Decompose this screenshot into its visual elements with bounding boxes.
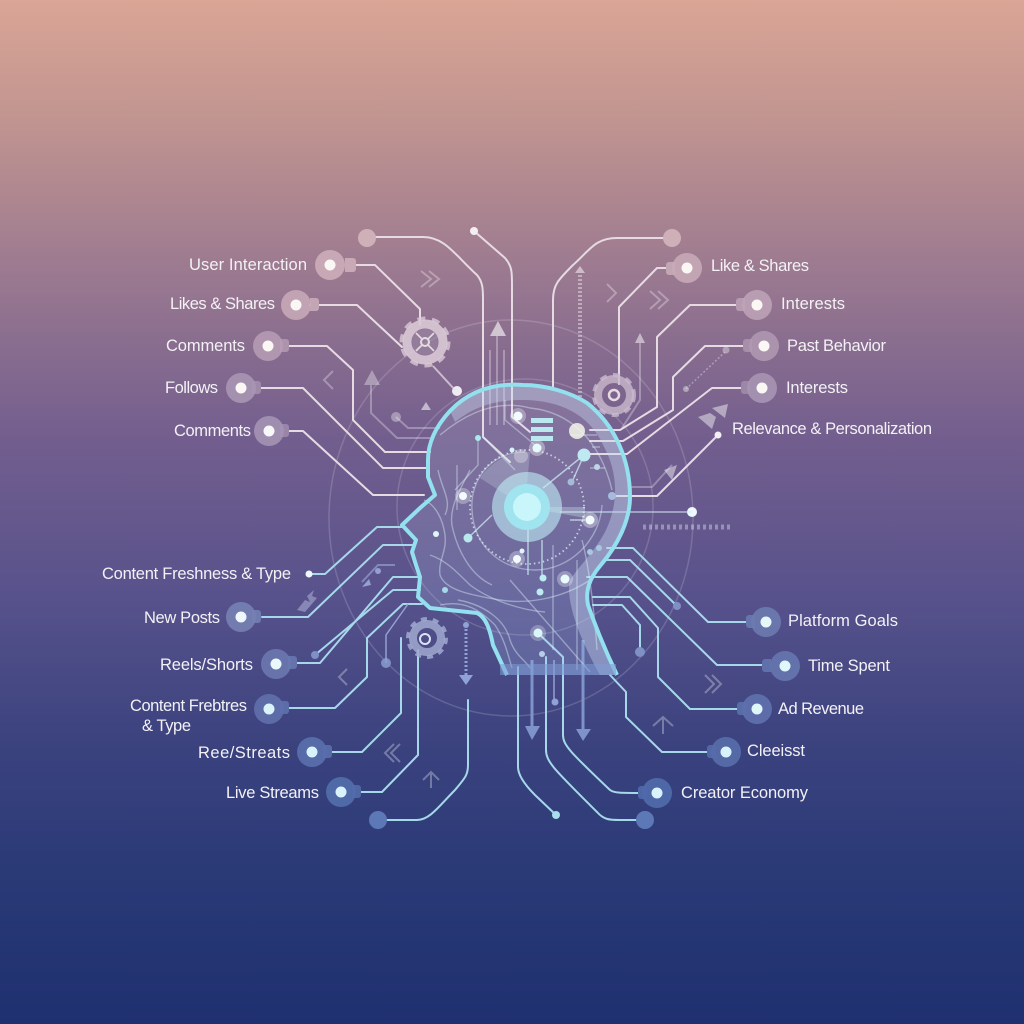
label: Likes & Shares [170,290,319,320]
label: Live Streams [226,777,361,807]
label: New Posts [144,602,261,632]
label: Interests upper: Interests [781,295,845,313]
neural nodes inside head [433,408,616,657]
icon: upper right gear [594,375,634,415]
label: Like & Shares right: Like & Shares [711,257,809,275]
label: Interests lower [741,373,848,403]
neck base [500,664,616,675]
label: New Posts: New Posts [144,609,220,627]
label: Content Frebtres & Type [130,694,289,735]
label: Ree/Streats [198,737,332,767]
label: Live Streams: Live Streams [226,784,319,802]
label: Comments lower [174,416,289,446]
label: Ad Revenue: Ad Revenue [778,700,864,718]
label: Relevance & Personalization: Relevance & Personalization [732,420,932,438]
label: Interests upper [736,290,845,320]
faint decorative arrows near the head [297,227,732,819]
label: Comments upper: Comments [166,337,245,355]
lower left circuit lines [262,527,468,820]
label: Likes & Shares: Likes & Shares [170,295,275,313]
central hub [470,450,585,564]
head fill [402,385,630,675]
label: Cleeisst [707,737,805,767]
label: Ad Revenue [737,694,864,724]
upper right circuit lines [553,238,750,496]
label: Platform Goals: Platform Goals [788,612,898,630]
head outline [402,385,630,675]
label: Platform Goals [746,607,898,637]
label: Creator Economy [638,778,809,808]
icon: bars in head [531,418,553,441]
head silhouette [402,385,630,675]
label: Follows: Follows [165,379,218,397]
label: Reels/Shorts: Reels/Shorts [160,656,253,674]
label: Content Frebtres & Type: Content Frebtres [130,697,247,715]
label: Follows [165,373,261,403]
top free nodes [358,229,681,829]
lower center and right circuit lines [518,548,768,820]
outer orbit rings [329,320,693,716]
label: Comments upper [166,331,289,361]
label: Ree/Streats: Ree/Streats [198,744,290,762]
label: Like & Shares right [666,253,809,283]
upper left circuit lines [255,231,530,495]
label: Time Spent: Time Spent [808,657,890,675]
label: Interests lower: Interests [786,379,848,397]
head side band [450,385,630,675]
label: User Interaction [189,250,356,280]
label: Comments lower: Comments [174,422,251,440]
label: Creator Economy: Creator Economy [681,784,809,802]
icon: lower left gear [408,619,446,657]
icon: upper left gear [402,318,448,366]
label: Reels/Shorts [160,649,297,679]
label: Past Behavior [743,331,886,361]
faint decorative arrows and chevrons [324,271,721,788]
label: Content Frebtres & Type: & Type [142,717,191,735]
label: Time Spent [762,651,890,681]
label: User Interaction: User Interaction [189,256,307,274]
label: Past Behavior: Past Behavior [787,337,886,355]
inner brain lines [424,400,612,672]
label: Cleeisst: Cleeisst [747,742,805,760]
label: Content Freshness & Type: Content Freshness & Type [102,565,291,583]
